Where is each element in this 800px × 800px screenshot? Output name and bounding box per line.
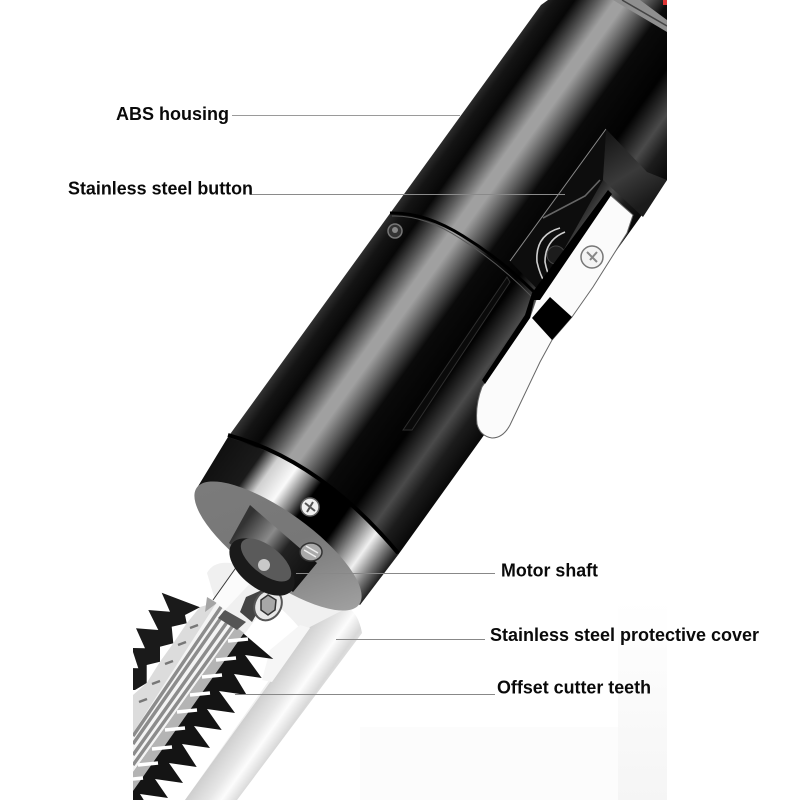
label: offset cutter teeth: Offset cutter teeth bbox=[497, 678, 651, 698]
silver end cap bbox=[197, 437, 398, 605]
hex nut bbox=[240, 590, 283, 622]
motor shaft rod bbox=[212, 568, 249, 630]
tube body reflection outline bbox=[403, 277, 510, 430]
label: motor shaft: Motor shaft bbox=[501, 560, 598, 580]
left silver bed bbox=[133, 597, 216, 732]
clip flap bbox=[603, 129, 667, 217]
motor hub bbox=[229, 505, 323, 596]
screw: cap bbox=[301, 498, 319, 516]
leader line: cutter teeth bbox=[235, 694, 495, 696]
product illustration: trimmer bbox=[120, 0, 667, 800]
clip recess bbox=[510, 129, 606, 292]
right silver bed bbox=[133, 627, 244, 791]
cap face bbox=[194, 482, 362, 610]
clip dark edge bbox=[482, 190, 612, 384]
right tooth highlights bbox=[123, 639, 248, 780]
label: stainless steel protective cover: Stainless steel protective cover bbox=[490, 625, 759, 645]
right cutter teeth bbox=[133, 634, 274, 800]
top silver band bbox=[613, 0, 667, 32]
leader line: motor shaft bbox=[296, 572, 495, 574]
leader line: protective cover bbox=[336, 638, 485, 640]
clip metal plate bbox=[477, 193, 633, 438]
label: ABS housing: ABS housing bbox=[116, 104, 229, 124]
black ABS housing tube bbox=[228, 0, 667, 555]
screw: hub bbox=[300, 543, 322, 561]
leader line: ABS housing bbox=[232, 114, 460, 116]
screw: clip bbox=[581, 246, 603, 268]
cutter blade bbox=[120, 593, 273, 800]
label: stainless steel button: Stainless steel button bbox=[68, 178, 253, 198]
housing seam bbox=[390, 213, 538, 297]
clip black square bbox=[532, 297, 572, 340]
spring bbox=[537, 180, 600, 283]
leader line: stainless steel button bbox=[250, 194, 565, 196]
blade spine stripes bbox=[133, 602, 236, 772]
protective cover bbox=[185, 563, 362, 800]
cap collar ring bbox=[228, 435, 398, 553]
stainless steel button clip bbox=[477, 129, 667, 438]
screw: housing bbox=[388, 224, 402, 238]
left cutter teeth bbox=[130, 593, 200, 690]
